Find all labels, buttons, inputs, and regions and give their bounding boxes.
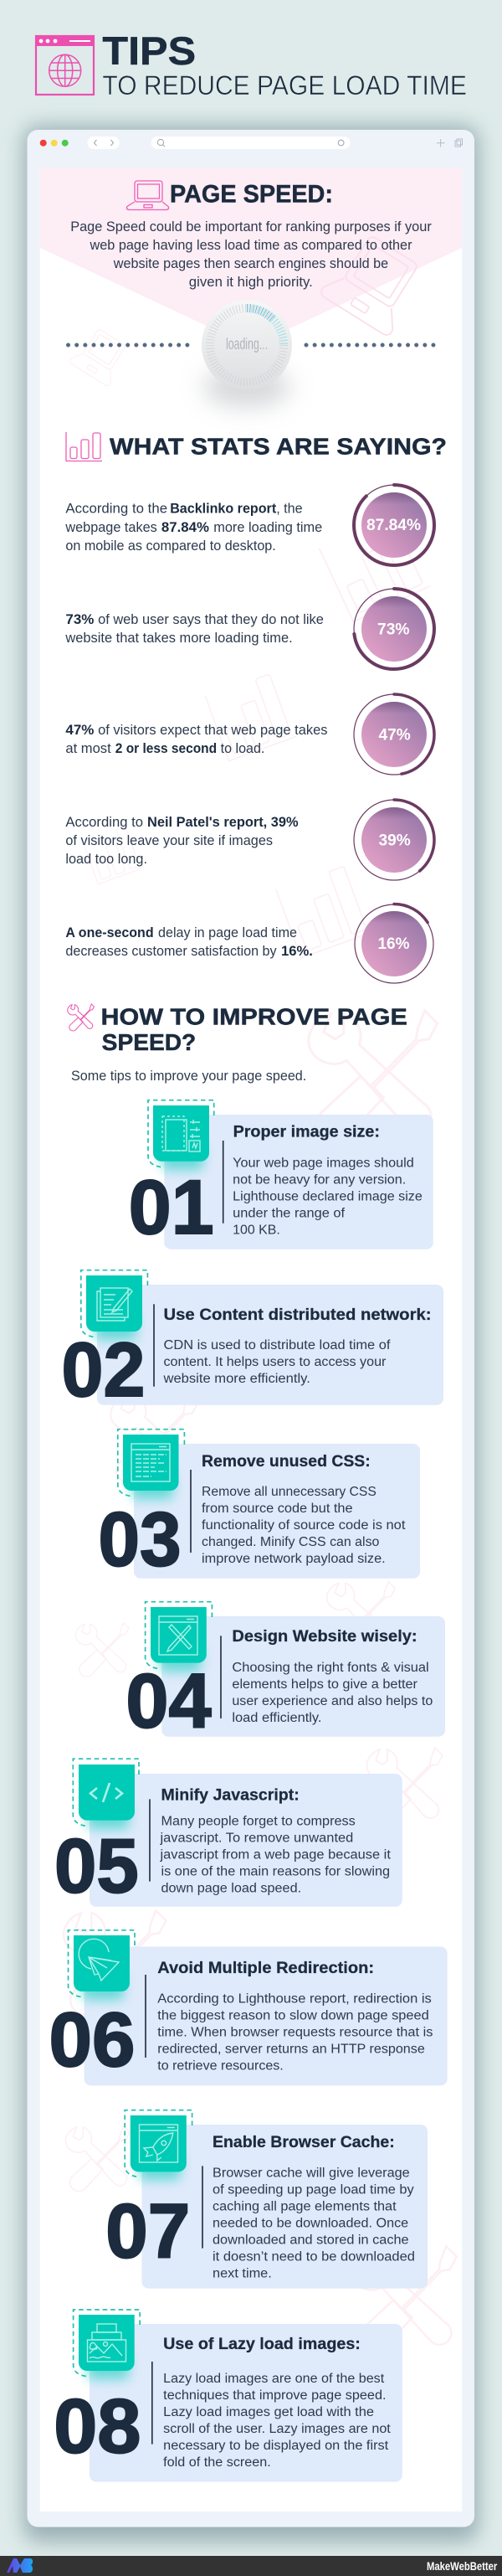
body: of speeding up page load time by	[213, 2183, 414, 2197]
body: load efficiently.	[232, 1711, 321, 1725]
card	[90, 2324, 402, 2482]
body: under the range of	[233, 1206, 346, 1220]
icon: wrench and screwdriver	[68, 1004, 94, 1031]
stat 5 circle: 16%	[378, 935, 410, 953]
number: 03	[99, 1497, 182, 1582]
title: Proper image size:	[233, 1124, 380, 1141]
divider	[145, 1975, 146, 2058]
body: Lighthouse declared image size	[233, 1189, 423, 1203]
body: Lazy load images get load with the	[163, 2405, 374, 2419]
body: user experience and also helps to	[232, 1694, 433, 1708]
divider	[153, 1304, 155, 1387]
body: Lazy load images are one of the best	[163, 2372, 385, 2386]
stat 1 text	[64, 502, 322, 554]
body: According to Lighthouse report, redirection is	[157, 1991, 432, 2007]
card	[142, 2125, 428, 2289]
icon: bar chart	[66, 432, 102, 461]
logo	[7, 2558, 33, 2573]
stat 5 circle	[355, 904, 433, 983]
icon: laptop	[126, 181, 169, 209]
stat 2 text: 73%	[65, 612, 95, 627]
stat 1 circle: 87.84%	[366, 517, 421, 534]
intro paragraph: website pages then search engines should be	[113, 256, 388, 271]
stat 2 text	[64, 612, 324, 646]
heading: how to improve page speed	[100, 1003, 407, 1055]
body: down page load speed.	[161, 1882, 301, 1896]
stat 4 text: According to	[65, 815, 143, 830]
title: Minify Javascript:	[161, 1786, 300, 1804]
icon: browser with globe	[35, 35, 95, 95]
body: Choosing the right fonts & visual	[232, 1661, 429, 1675]
body	[232, 1661, 433, 1725]
title: Remove unused CSS:	[202, 1453, 371, 1471]
icon tile: rocket	[125, 2110, 192, 2180]
stat 1 text: more loading time	[213, 520, 322, 535]
body: changed. Minify CSS can also	[202, 1535, 379, 1549]
divider	[220, 1636, 222, 1718]
loading dial: loading...	[226, 336, 268, 353]
body: fold of the screen.	[163, 2455, 271, 2470]
stat 1 text: , the	[276, 502, 303, 517]
icon tile: image size	[148, 1100, 214, 1170]
tip 04	[126, 1602, 445, 1744]
stat 4 text: Neil Patel's report, 39%	[147, 815, 299, 830]
divider	[202, 2166, 203, 2249]
stat 3 text	[65, 723, 328, 756]
stat 5 text: 16%.	[281, 944, 313, 959]
stat 3 text: of visitors expect that web page takes	[98, 723, 327, 738]
title: Enable Browser Cache:	[213, 2134, 395, 2151]
footer bar	[0, 2556, 502, 2576]
divider	[151, 2362, 153, 2445]
ghost background icons	[64, 229, 457, 2354]
stat 5 text: A one-second	[65, 925, 154, 940]
body: the biggest reason to slow down page speed	[157, 2008, 429, 2023]
tip 07	[105, 2110, 428, 2289]
stat 1 text: According to the	[65, 502, 167, 517]
card	[85, 1946, 448, 2085]
card	[161, 1616, 445, 1737]
icon tile: paper plane	[69, 1930, 135, 2000]
tip 05	[54, 1759, 402, 1909]
body: needed to be downloaded. Once	[213, 2217, 408, 2231]
title: Use of Lazy load images:	[163, 2336, 361, 2353]
browser toolbar	[40, 137, 462, 149]
body	[202, 1485, 406, 1566]
panel: page speed	[69, 181, 433, 407]
number: 06	[49, 1997, 136, 2083]
heading: how to improve page speed: HOW TO IMPROVE PAGE	[100, 1003, 407, 1029]
card	[164, 1115, 433, 1249]
divider	[149, 1799, 151, 1882]
intro paragraph: web page having less load time as compared to other	[90, 238, 412, 253]
body	[159, 1815, 392, 1896]
tip 06	[49, 1930, 448, 2085]
body: Many people forget to compress	[161, 1815, 356, 1829]
header	[35, 28, 467, 100]
heading: what stats are saying: WHAT STATS ARE SAYING?	[110, 434, 447, 460]
intro paragraph: Page Speed could be important for ranking purposes if your	[70, 219, 432, 234]
number: 02	[62, 1327, 145, 1413]
divider	[190, 1470, 192, 1553]
body: CDN is used to distribute load time of	[164, 1338, 391, 1352]
stat 4 circle: 39%	[378, 832, 411, 849]
body: caching all page elements that	[213, 2200, 397, 2214]
stat 2 circle	[354, 589, 434, 669]
subtitle: TO REDUCE PAGE LOAD TIME	[102, 70, 467, 100]
body: improve network payload size.	[202, 1552, 386, 1566]
icon tile: lazy images	[74, 2310, 140, 2379]
stat 2 text: of web user says that they do not like	[98, 612, 324, 627]
title: TIPS	[102, 28, 196, 73]
stat 3 text: to load.	[221, 741, 264, 756]
stat 4 text: of visitors leave your site if images	[65, 833, 273, 848]
dotted line left	[69, 343, 187, 347]
icon tile: design tools	[146, 1602, 212, 1672]
pink chevron banner	[40, 167, 462, 347]
loading dial	[202, 300, 292, 407]
divider	[223, 1141, 224, 1224]
number: 05	[54, 1824, 139, 1909]
stat 1 text: on mobile as compared to desktop.	[65, 538, 276, 554]
number: 04	[126, 1658, 212, 1744]
intro paragraph	[70, 219, 432, 290]
stat 3 circle	[354, 694, 434, 775]
body: javascript from a web page because it	[159, 1848, 392, 1862]
stat 5 text: delay in page load time	[158, 925, 297, 940]
stat 5 text	[65, 925, 313, 959]
content area	[40, 167, 462, 2512]
title: Use Content distributed network:	[164, 1306, 432, 1324]
stat 4 text: load too long.	[65, 852, 147, 867]
body	[213, 2166, 415, 2281]
tip 03	[99, 1430, 420, 1582]
dotted line right	[306, 343, 433, 347]
subheading: Some tips to improve your page speed.	[71, 1069, 306, 1084]
stat 3 circle: 47%	[378, 726, 411, 744]
stat 3 text: 47%	[65, 723, 95, 738]
body: redirected, server returns an HTTP response	[157, 2042, 425, 2057]
body: Your web page images should	[233, 1156, 414, 1170]
icon tile: code page	[118, 1430, 184, 1499]
intro paragraph: given it high priority.	[189, 275, 313, 290]
body: functionality of source code is not	[202, 1518, 406, 1533]
body: is one of the main reasons for slowing	[161, 1865, 390, 1879]
body: from source code but the	[202, 1502, 353, 1516]
body: to retrieve resources.	[157, 2058, 284, 2074]
body: downloaded and stored in cache	[213, 2233, 409, 2248]
stat 1 circle	[354, 485, 434, 565]
tip 02	[62, 1270, 443, 1413]
body: techniques that improve page speed.	[163, 2388, 386, 2403]
body: website more efficiently.	[162, 1372, 310, 1386]
heading: how to improve page speed: SPEED?	[102, 1029, 196, 1055]
body: not be heavy for any version.	[233, 1172, 406, 1187]
icon tile: content document	[81, 1270, 147, 1340]
stat 3 text: at most	[65, 741, 111, 756]
stat 4 circle	[354, 800, 434, 880]
body: next time.	[213, 2267, 272, 2281]
body: time. When browser requests resource that is	[157, 2025, 433, 2040]
stat 1 text: 87.84%	[161, 520, 209, 535]
stat 2 text: website that takes more loading time.	[64, 631, 293, 646]
stat 3 text: 2 or less second	[115, 741, 217, 756]
title: Design Website wisely:	[232, 1628, 417, 1646]
stat 1 text: Backlinko report	[170, 502, 277, 517]
icon tile: code brackets	[73, 1759, 139, 1829]
heading: page speed: PAGE SPEED:	[170, 181, 333, 208]
panel: how to improve	[68, 1003, 407, 1084]
panel: what stats are saying	[64, 432, 447, 983]
body: Remove all unnecessary CSS	[202, 1485, 376, 1499]
body	[163, 2372, 392, 2470]
body	[157, 1991, 433, 2074]
body: javascript. To remove unwanted	[159, 1832, 353, 1846]
stat 1 text: webpage takes	[64, 520, 157, 535]
body: 100 KB.	[233, 1223, 280, 1237]
stat 5 text: decreases customer satisfaction by	[65, 944, 277, 959]
body: necessary to be displayed on the first	[163, 2439, 389, 2453]
card	[97, 1285, 443, 1405]
body	[162, 1338, 391, 1386]
body	[233, 1156, 423, 1237]
stat 4 text	[65, 815, 299, 867]
stat 2 circle: 73%	[377, 621, 410, 638]
number: 01	[129, 1165, 214, 1250]
body: content. It helps users to access your	[164, 1355, 386, 1369]
card	[134, 1444, 420, 1579]
number: 08	[54, 2384, 141, 2470]
title: Avoid Multiple Redirection:	[157, 1960, 374, 1977]
body: Browser cache will give leverage	[213, 2166, 410, 2181]
tip 08	[54, 2310, 402, 2482]
number: 07	[105, 2188, 190, 2274]
tip 01	[129, 1100, 433, 1250]
body: it doesn’t need to be downloaded	[213, 2250, 415, 2264]
card	[90, 1774, 402, 1907]
body: elements helps to give a better	[232, 1677, 417, 1692]
body: scroll of the user. Lazy images are not	[163, 2422, 392, 2436]
